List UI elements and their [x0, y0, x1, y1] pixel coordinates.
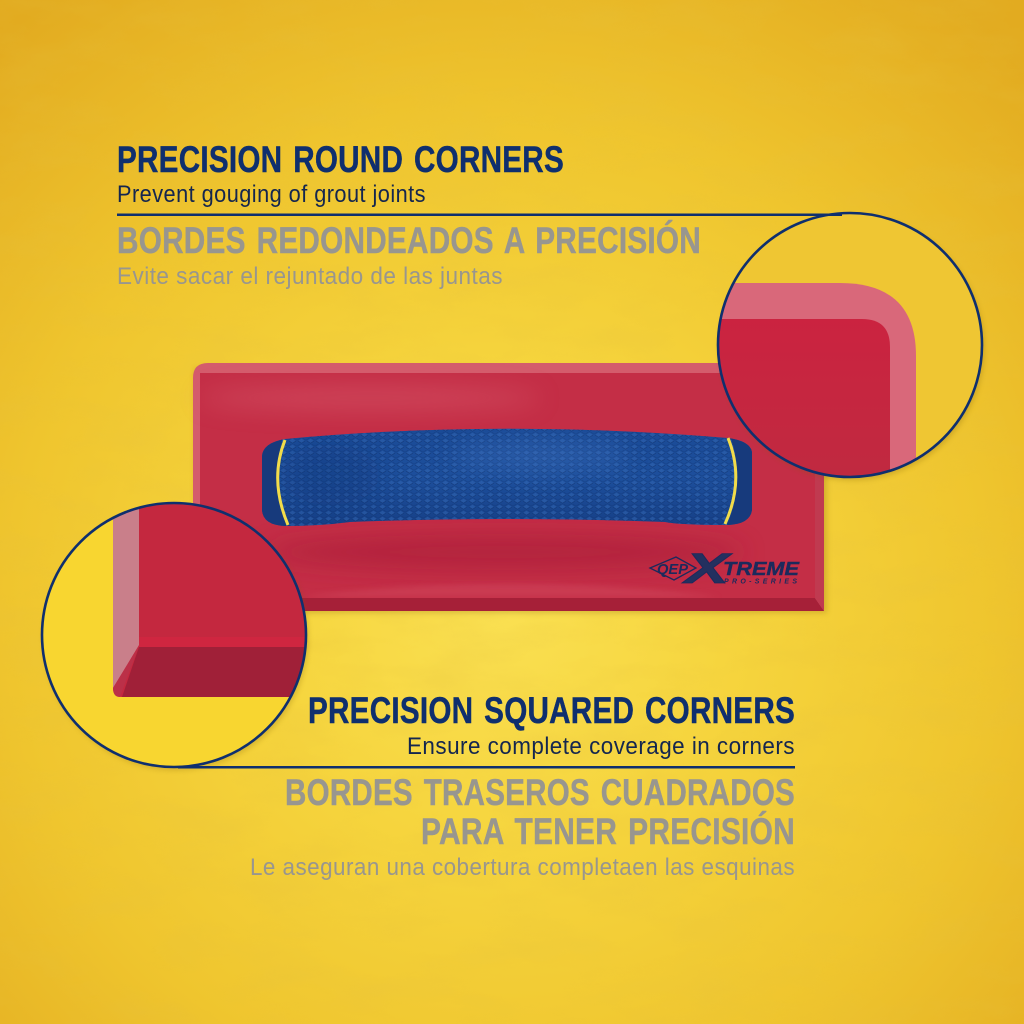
- logo: QEP Xtreme: PRO-SERIES: [724, 578, 797, 586]
- handle grip: [258, 425, 758, 530]
- logo: QEP Xtreme: [650, 545, 800, 593]
- heading: bordes redondeados: BORDES REDONDEADOS A PRECISIÓN: [117, 219, 701, 261]
- subtext: spanish round: Evite sacar el rejuntado de las juntas: [117, 263, 503, 290]
- heading: bordes traseros: BORDES TRASEROS CUADRADOS: [285, 772, 795, 813]
- subtext: english round: Prevent gouging of grout joints: [117, 181, 426, 208]
- logo: QEP Xtreme: X: [682, 545, 733, 593]
- float body: [193, 363, 827, 613]
- logo: QEP Xtreme: QEP: [657, 561, 689, 578]
- subtext: spanish squared: Le aseguran una cobertura completaen las esquinas: [250, 854, 795, 881]
- heading: precision round corners: PRECISION ROUND CORNERS: [117, 139, 564, 180]
- subtext: english squared: Ensure complete coverage in corners: [407, 733, 795, 760]
- logo: QEP Xtreme: TREME: [723, 559, 800, 579]
- divider: squared: [178, 766, 795, 768]
- text block: round corners: [117, 139, 842, 290]
- callout: round corner magnifier: [700, 213, 984, 490]
- divider: round: [117, 214, 842, 216]
- product: grout float: [193, 363, 827, 613]
- text block: squared corners: [178, 690, 795, 881]
- callout: squared corner magnifier: [42, 495, 320, 770]
- heading: para tener precision: PARA TENER PRECISIÓN: [421, 810, 795, 852]
- heading: precision squared corners: PRECISION SQUARED CORNERS: [308, 690, 795, 731]
